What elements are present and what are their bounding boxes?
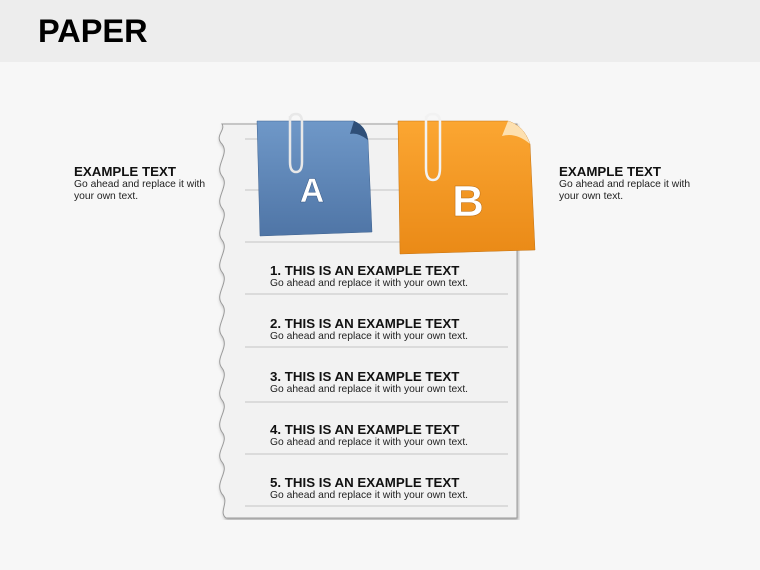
left text block xyxy=(74,164,205,202)
right text block: your own text. xyxy=(559,191,623,202)
header band xyxy=(0,0,760,62)
list item 3: 3. THIS IS AN EXAMPLE TEXT xyxy=(270,369,459,384)
list item 3: Go ahead and replace it with your own text. xyxy=(270,384,468,395)
note B: B xyxy=(452,177,484,226)
list item 5: Go ahead and replace it with your own text. xyxy=(270,490,468,501)
note B xyxy=(398,120,536,254)
left text block: your own text. xyxy=(74,191,138,202)
panel: paper sheet xyxy=(218,124,520,520)
list item 5 xyxy=(270,475,468,501)
right text block: Go ahead and replace it with xyxy=(559,179,690,190)
list item 4: Go ahead and replace it with your own text. xyxy=(270,437,468,448)
list item 2: 2. THIS IS AN EXAMPLE TEXT xyxy=(270,316,459,331)
icon: paperclip A xyxy=(290,114,302,172)
list item 2 xyxy=(270,316,468,342)
left text block: EXAMPLE TEXT xyxy=(74,164,176,179)
left text block: Go ahead and replace it with xyxy=(74,179,205,190)
list item 1: 1. THIS IS AN EXAMPLE TEXT xyxy=(270,263,459,278)
note A xyxy=(256,113,372,236)
list item 4: 4. THIS IS AN EXAMPLE TEXT xyxy=(270,422,459,437)
right text block: EXAMPLE TEXT xyxy=(559,164,661,179)
title: PAPER xyxy=(38,13,148,49)
list item 2: Go ahead and replace it with your own text. xyxy=(270,331,468,342)
list item 1: Go ahead and replace it with your own text. xyxy=(270,278,468,289)
note A: A xyxy=(300,172,324,210)
list item 1 xyxy=(270,263,468,289)
list item 5: 5. THIS IS AN EXAMPLE TEXT xyxy=(270,475,459,490)
list item 3 xyxy=(270,369,468,395)
list item 4 xyxy=(270,422,468,448)
right text block xyxy=(559,164,690,202)
icon: paperclip B xyxy=(426,114,440,180)
